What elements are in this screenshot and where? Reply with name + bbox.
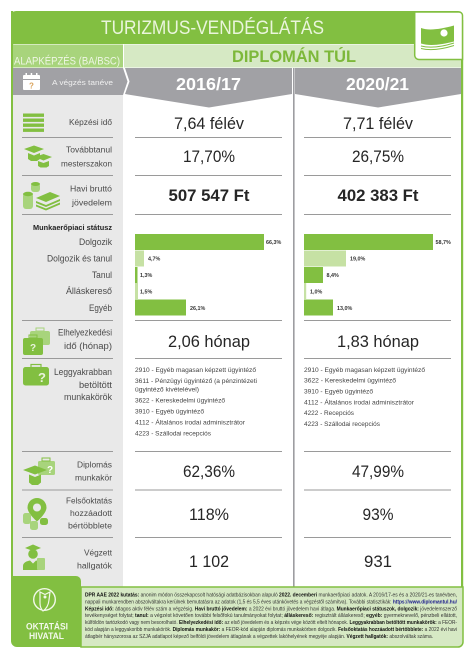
row: Elhelyezkedési idő: Elhelyezkedési — [58, 328, 112, 338]
row: Végzett hallgatók: hallgatók — [77, 562, 113, 570]
row: Havi bruttó jövedelem: 402 383 Ft — [338, 186, 419, 205]
row: Elhelyezkedési idő: idő (hónap) — [64, 341, 112, 351]
row: Képzési idő: 7,64 félév — [174, 114, 244, 133]
methodology note: átlagbér hányszorosa az SZJA adatlapot képező belföldi jövedelem átlagának a végzettek lakóhelyének megyéje alapján. Végzett hallgatók: abszolváltak száma. — [85, 634, 433, 640]
row: Képzési idő — [23, 114, 413, 133]
methodology note: Képzési idő: átlagos aktív félév szám a végzésig. Havi bruttó jövedelem: a 2022 évi bruttó jövedelem havi átlaga. Munkaerőpiaci státuszok, dolgozik: jövedelemszerző — [85, 606, 457, 612]
row: Felsőoktatás hozzáadott bértöbblete: hozzáadott — [70, 509, 113, 518]
subtitle band: DIPLOMÁN TÚL — [232, 47, 356, 66]
job list 2020/21: 3622 - Kereskedelmi ügyintéző — [304, 378, 396, 384]
icon: graduate — [23, 544, 45, 570]
labor market status labels: Munkaerőpiaci státusz — [33, 225, 113, 232]
icon: banknote tab — [415, 12, 462, 60]
icon: cap and briefcase — [23, 458, 55, 485]
row: Diplomás munkakör: Diplomás — [77, 460, 112, 470]
bar chart 2016/17: 4,7% — [148, 256, 160, 262]
row separators — [22, 138, 451, 538]
methodology note: nappali munkarendben abszolváltakra kerülnek bemutatásra az adatok (1,5 és 5,5 éves utánkövetés a végzéstől számítva). További statisztikák: https://www.diplomantul.hu/ — [85, 600, 458, 606]
row: Diplomás munkakör — [23, 458, 404, 485]
subtitle band — [13, 44, 461, 68]
icon: coins and banknotes — [23, 182, 60, 210]
row: Felsőoktatás hozzáadott bértöbblete: bértöbblete — [68, 522, 113, 530]
labor market status labels: Dolgozik — [79, 237, 112, 247]
row: Diplomás munkakör: 62,36% — [183, 462, 235, 481]
row: Havi bruttó jövedelem: Havi bruttó — [70, 184, 113, 194]
row: Felsőoktatás hozzáadott bértöbblete: 118% — [189, 505, 229, 524]
row: Képzési idő: 7,71 félév — [343, 114, 413, 133]
row: Továbbtanul mesterszakon: 17,70% — [183, 147, 235, 166]
job list 2016/17: 3611 - Pénzügyi ügyintéző (a pénzintézeti — [135, 378, 257, 385]
row: Leggyakrabban betöltött munkakörök: Leggyakrabban — [54, 367, 112, 377]
row: Képzési idő: Képzési idő — [69, 118, 113, 127]
row: Leggyakrabban betöltött munkakörök: munkakörök — [64, 392, 112, 402]
row: Elhelyezkedési idő: 1,83 hónap — [337, 332, 419, 351]
labor market status labels: Tanul — [92, 270, 112, 280]
column header 2016/17 — [125, 68, 292, 108]
row: Továbbtanul mesterszakon — [24, 146, 404, 168]
sidebar background — [13, 95, 123, 587]
icon: briefcases: ? — [30, 343, 36, 354]
job list 2020/21: 4112 - Általános irodai adminisztrátor — [304, 398, 415, 406]
job list 2020/21: 4223 - Szállodai recepciós — [304, 421, 381, 428]
job list 2016/17: 2910 - Egyéb magasan képzett ügyintéző — [135, 367, 256, 374]
job list 2016/17: ügyintéző kivételével) — [135, 386, 199, 394]
bar chart 2020/21: 13,0% — [337, 306, 352, 312]
row: Leggyakrabban betöltött munkakörök: betöltött — [79, 380, 113, 390]
icon: stacked lines — [23, 114, 44, 132]
column header 2016/17: 2016/17 — [176, 74, 241, 94]
labor market status labels: Álláskereső — [66, 286, 112, 296]
row: Továbbtanul mesterszakon: mesterszakon — [61, 160, 112, 168]
row: Továbbtanul mesterszakon: Továbbtanul — [66, 146, 112, 154]
job list 2016/17: 4223 - Szállodai recepciós — [135, 430, 212, 438]
icon: pin and coins — [23, 498, 48, 530]
logo: Oktatási Hivatal — [11, 576, 81, 647]
bar chart 2020/21: 58,7% — [436, 240, 451, 246]
logo: Oktatási Hivatal: OKTATÁSI — [26, 622, 68, 632]
job list 2016/17: 3622 - Kereskedelmi ügyintéző — [135, 398, 225, 404]
bar chart 2016/17: 1,5% — [140, 290, 152, 296]
row: Végzett hallgatók: 931 — [364, 552, 392, 571]
icon: briefcases — [23, 328, 50, 355]
title banner: TURIZMUS-VENDÉGLÁTÁS — [101, 16, 324, 39]
row: Havi bruttó jövedelem: 507 547 Ft — [168, 186, 250, 205]
year row label: A végzés tanéve — [52, 78, 113, 87]
bar chart 2016/17: 1,3% — [140, 273, 152, 279]
column header 2020/21 — [295, 68, 461, 108]
labor market status labels: Egyéb — [89, 303, 112, 313]
row: Felsőoktatás hozzáadott bértöbblete — [23, 496, 394, 530]
bar chart 2016/17 — [135, 234, 281, 316]
methodology note: tevékenységet folytat; tanul: a végzést követően további felsőfokú tanulmányokat folytat; álláskereső: regisztrált álláskereső; egyéb: gyermeknevelő, pénzbeli ellátott, — [85, 613, 457, 619]
row: Elhelyezkedési idő: 2,06 hónap — [168, 332, 250, 351]
bar chart 2020/21: 19,0% — [350, 256, 365, 262]
row: Felsőoktatás hozzáadott bértöbblete: Felsőoktatás — [66, 496, 112, 506]
labor market status labels — [33, 225, 113, 313]
job list 2016/17 — [135, 367, 257, 438]
row: Végzett hallgatók: 1 102 — [189, 552, 229, 571]
job list 2016/17: 3910 - Egyéb ügyintéző — [135, 408, 204, 416]
bar chart 2020/21 — [304, 234, 451, 316]
row: Végzett hallgatók — [23, 544, 392, 571]
bar chart 2020/21: 8,4% — [326, 273, 339, 279]
bar chart 2016/17: 66,3% — [266, 240, 281, 246]
row: Diplomás munkakör: munkakör — [75, 474, 112, 482]
job list 2020/21 — [304, 367, 425, 428]
methodology note — [81, 587, 463, 647]
row: Havi bruttó jövedelem — [23, 182, 419, 210]
bar chart 2020/21: 1,0% — [310, 290, 322, 296]
methodology note: DPR AAE 2022 kutatás: anonim módon összekapcsolt hatósági adatbázisokban alapuló 2022. decemberi munkaerőpiaci adatok. A 2016/17-es és a 2020/21-es tanévben, — [85, 593, 457, 599]
methodology note: külföldön tartózkodó vagy nem besorolható. Elhelyezkedési idő: az első jövedelem és a képzés vége között eltelt hónapok. Leggyakrabban betöltött munkakörök: a FEOR- — [85, 620, 457, 626]
row: Leggyakrabban betöltött munkakörök — [23, 364, 113, 402]
row: Havi bruttó jövedelem: jövedelem — [71, 198, 112, 208]
icon: briefcase with question mark: ? — [38, 370, 46, 385]
job list 2020/21: 3910 - Egyéb ügyintéző — [304, 388, 373, 396]
labor market status labels: Dolgozik és tanul — [47, 254, 112, 264]
icon: graduation caps — [24, 146, 52, 168]
logo: Oktatási Hivatal: HIVATAL — [29, 631, 64, 641]
job list 2020/21: 2910 - Egyéb magasan képzett ügyintéző — [304, 367, 425, 374]
column header 2020/21: 2020/21 — [346, 74, 409, 94]
row: Elhelyezkedési idő — [23, 328, 419, 355]
title banner — [11, 11, 463, 44]
job list 2016/17: 4112 - Általános irodai adminisztrátor — [135, 418, 246, 426]
row: Diplomás munkakör: 47,99% — [352, 462, 404, 481]
icon: calendar: ? — [29, 82, 34, 90]
job list 2020/21: 4222 - Recepciós — [304, 410, 355, 417]
bar chart 2016/17: 26,1% — [190, 306, 205, 312]
methodology note: kód alapján a leggyakoribb munkakörök. Diplomás munkakör: a FEOR-kód alapján diplomás munkakörben dolgozik. Felsőoktatás hozzáadott bértöbblete: a 2022 évi havi — [85, 627, 457, 633]
row: Felsőoktatás hozzáadott bértöbblete: 93% — [362, 505, 394, 524]
row: Továbbtanul mesterszakon: 26,75% — [352, 147, 404, 166]
row: Végzett hallgatók: Végzett — [84, 548, 113, 558]
year row label — [13, 68, 128, 95]
subtitle band: ALAPKÉPZÉS (BA/BSC) — [14, 54, 120, 68]
icon: cap and briefcase: ? — [47, 465, 53, 476]
